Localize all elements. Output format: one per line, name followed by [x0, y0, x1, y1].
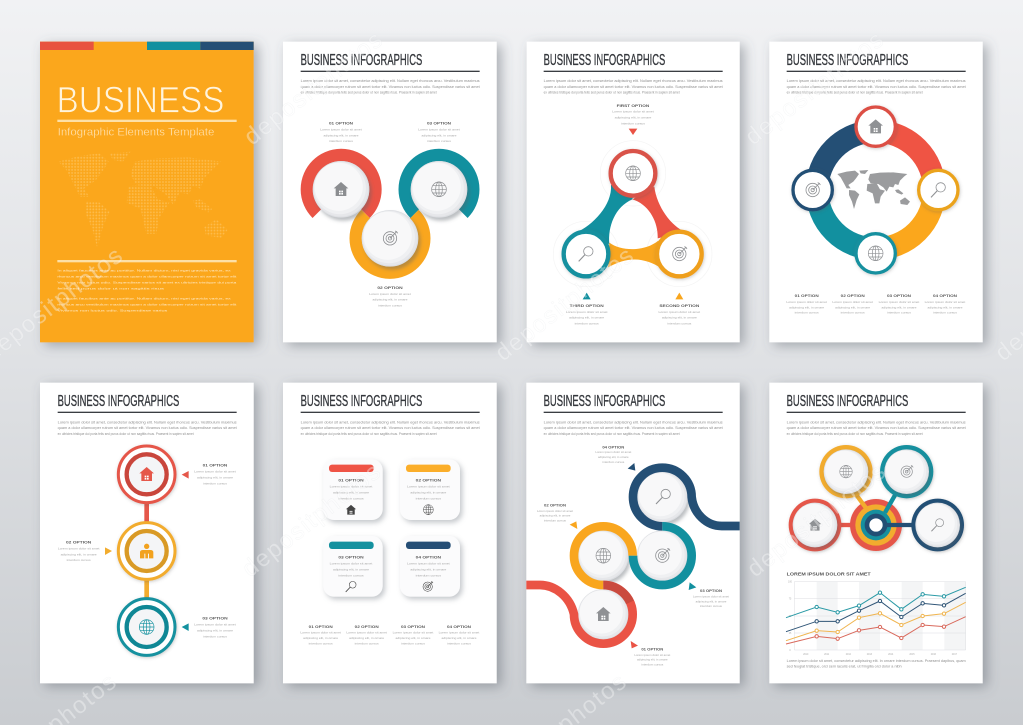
icon: home	[596, 607, 611, 621]
watermarks: depositphotos	[490, 241, 640, 367]
arrow: red	[629, 129, 637, 135]
connectors	[144, 503, 149, 599]
label: first option: FIRST OPTION	[617, 104, 650, 108]
intro text: Lorem ipsum dolor sit amet, consectetur adipiscing elit. Nullam eget rhoncus arcu. Vestibulum maximus	[301, 79, 480, 83]
band: red	[526, 585, 633, 644]
line chart: 2013	[867, 654, 873, 656]
card: 04 option	[400, 536, 460, 597]
label: 02 option: 02 OPTION	[66, 540, 92, 544]
line chart: 75	[789, 599, 792, 601]
node: magnifier	[911, 499, 964, 551]
heading: BUSINESS INFOGRAPHICS	[301, 52, 422, 69]
card: 03 option: Lorem ipsum dolor sit amet	[330, 561, 373, 565]
world map	[837, 170, 910, 209]
label: 01 option: interdum cursus	[641, 663, 664, 667]
intro text	[544, 420, 723, 436]
series: orange	[786, 602, 966, 641]
label: 04 option: adipiscing elit, in ornare	[927, 305, 963, 309]
label: 03 option	[194, 617, 236, 638]
card: 04 option: 04 OPTION	[416, 556, 441, 560]
label: third option: adipiscing elit, in ornare	[569, 316, 605, 320]
cover body text: rhoncus arcu vestibulum maximus quam a dolor ullamcorper rutrum sit amet tortor elit	[57, 302, 237, 306]
card: 04 option: adipiscing elit, in ornare	[410, 568, 447, 572]
label: 02 option: 02 OPTION	[841, 294, 865, 298]
label: 04 option: adipiscing elit, in ornare	[598, 455, 629, 459]
label: 01 option: 01 OPTION	[329, 122, 353, 126]
band: orange	[574, 526, 633, 585]
series: red	[786, 617, 966, 644]
line chart: 0	[789, 650, 791, 652]
card: 03 option: interdum cursus	[338, 573, 364, 577]
band: teal	[575, 185, 635, 244]
panel: cover page	[40, 42, 254, 342]
arc: orange	[356, 214, 424, 273]
label: 02 option	[58, 540, 100, 562]
cover body text: Vivamus non luctus odio. Suspendisse varius sit amet ex ultricies tristique dui porta	[57, 281, 237, 285]
icon: magnifier	[656, 489, 670, 504]
label: 03 option: interdum cursus	[427, 139, 452, 143]
intro text: Lorem ipsum dolor sit amet, consectetur adipiscing elit. Nullam eget rhoncus arcu. Vestibulum maximus	[787, 79, 966, 83]
intro text: ex ultricies tristique dui porta felis sed purus dolor ut non sagittis risus. Praesent in sapien sit amet	[787, 91, 923, 95]
disc: target	[362, 210, 421, 270]
node: target	[793, 170, 832, 210]
node: home	[118, 446, 175, 503]
arrow: red	[182, 471, 189, 479]
label: 02 option: Lorem ipsum dolor sit amet	[58, 547, 100, 551]
label: 04 option: Lorem ipsum dolor sit amet	[595, 450, 631, 454]
discs	[578, 472, 690, 642]
heading: BUSINESS INFOGRAPHICS	[301, 393, 422, 410]
label: 01 option: 01 OPTION	[641, 648, 664, 652]
heading: BUSINESS INFOGRAPHICS	[544, 52, 665, 69]
line chart: 2011	[824, 654, 830, 656]
label: 01 option	[300, 625, 341, 645]
arrow: teal	[182, 623, 189, 631]
intro text: quam a dolor ullamcorper rutrum sit amet tortor elit. Vivamus non luctus odio. Suspendisse varius sit amet	[787, 85, 966, 89]
chart caption	[787, 659, 966, 669]
card: 02 option: Lorem ipsum dolor sit amet	[407, 485, 450, 489]
label: 01 option	[634, 648, 670, 667]
band: red	[632, 187, 685, 238]
intro text: ex ultricies tristique dui porta felis sed purus dolor ut non sagittis risus. Praesent in sapien sit amet	[58, 432, 194, 436]
series: navy	[786, 593, 966, 632]
panel: hub diagram and line chart	[769, 383, 983, 683]
label: second option: interdum cursus	[667, 321, 692, 325]
arrow: orange	[570, 521, 577, 529]
label: 02 option: interdum cursus	[355, 641, 379, 645]
label: 03 option: interdum cursus	[401, 641, 426, 645]
label: 03 option: interdum cursus	[203, 634, 228, 638]
icon: target	[656, 548, 670, 562]
label: 03 option	[393, 625, 434, 645]
intro text: quam a dolor ullamcorper rutrum sit amet tortor elit. Vivamus non luctus odio. Suspendisse varius sit amet	[301, 426, 480, 430]
label: 03 option: Lorem ipsum dolor sit amet	[418, 128, 460, 132]
ring segments	[817, 131, 934, 249]
node: target	[880, 445, 933, 498]
label: 03 option: adipiscing elit, in ornare	[881, 305, 917, 309]
label: 03 option: adipiscing elit, in ornare	[197, 629, 233, 633]
label: 04 option: interdum cursus	[933, 311, 958, 315]
node: magnifier	[564, 232, 608, 276]
node: globe	[611, 151, 655, 196]
intro text: Lorem ipsum dolor sit amet, consectetur adipiscing elit. Nullam eget rhoncus arcu. Vestibulum maximus	[544, 420, 723, 424]
band: teal	[633, 526, 692, 585]
label: 04 option	[439, 625, 480, 645]
cover colour tabs	[40, 42, 254, 50]
line chart: 25	[789, 633, 792, 635]
label: first option: interdum cursus	[621, 121, 646, 125]
label: 03 option: adipiscing elit, in ornare	[421, 133, 457, 137]
band: orange	[608, 241, 662, 268]
label: 04 option: Lorem ipsum dolor sit amet	[439, 631, 480, 635]
intro text: ex ultricies tristique dui porta felis sed purus dolor ut non sagittis risus. Praesent in sapien sit amet	[301, 91, 437, 95]
intro text: Lorem ipsum dolor sit amet, consectetur adipiscing elit. Nullam eget rhoncus arcu. Vestibulum maximus	[301, 420, 480, 424]
heading: BUSINESS INFOGRAPHICS	[787, 393, 908, 410]
label: 03 option: Lorem ipsum dolor sit amet	[879, 300, 920, 304]
label: 01 option: 01 OPTION	[309, 625, 333, 629]
card: 01 option: interdum cursus	[338, 496, 364, 500]
label: first option: adipiscing elit, in ornare	[615, 115, 652, 119]
label: second option	[658, 304, 700, 325]
label: 01 option: 01 OPTION	[795, 294, 819, 298]
card: 01 option: Lorem ipsum dolor sit amet	[330, 485, 373, 489]
label: 03 option	[693, 589, 729, 608]
cover title: BUSINESS	[57, 80, 224, 121]
label: third option: THIRD OPTION	[570, 304, 604, 308]
chart caption: Lorem ipsum dolor sit amet, consectetur adipiscing elit. In ornare interdum cursus. Praesent dapibus, quam	[787, 659, 966, 663]
card: 01 option: 01 OPTION	[338, 479, 364, 483]
dotted world map	[58, 152, 228, 248]
label: second option: adipiscing elit, in ornare	[662, 316, 697, 320]
label: 01 option: adipiscing elit, in ornare	[323, 133, 359, 137]
label: 03 option: 03 OPTION	[700, 589, 722, 593]
intro text: quam a dolor ullamcorper rutrum sit amet tortor elit. Vivamus non luctus odio. Suspendisse varius sit amet	[787, 426, 966, 430]
cover body text: felis sed purus dolor ut non sagittis risus	[57, 286, 165, 290]
label: 04 option: Lorem ipsum dolor sit amet	[925, 300, 966, 304]
label: 01 option: Lorem ipsum dolor sit amet	[194, 470, 236, 474]
label: 02 option: adipiscing elit, in ornare	[540, 514, 571, 518]
line chart: 2010	[803, 654, 809, 656]
label: 02 option: adipiscing elit, in ornare	[61, 552, 97, 556]
label: 03 option: 03 OPTION	[887, 294, 911, 298]
label: 03 option	[418, 122, 460, 143]
faint halo rings	[553, 141, 712, 287]
series: teal	[786, 587, 966, 618]
cover subtitle: Infographic Elements Template	[58, 126, 214, 138]
card: 04 option: Lorem ipsum dolor sit amet	[407, 561, 450, 565]
label: 01 option	[320, 122, 362, 143]
node: home	[789, 499, 841, 551]
label: first option	[612, 104, 654, 125]
node: globe	[819, 445, 873, 498]
arrow: teal	[689, 582, 696, 590]
label: 02 option: adipiscing elit, in ornare	[349, 636, 385, 640]
arrow: red	[631, 641, 638, 648]
label: 03 option: interdum cursus	[887, 311, 912, 315]
label: third option: interdum cursus	[575, 321, 599, 325]
intro text: ex ultricies tristique dui porta felis sed purus dolor ut non sagittis risus. Praesent in sapien sit amet	[544, 432, 680, 436]
intro text: Lorem ipsum dolor sit amet, consectetur adipiscing elit. Nullam eget rhoncus arcu. Vestibulum maximus	[58, 420, 237, 424]
heading: BUSINESS INFOGRAPHICS	[58, 393, 179, 410]
label: 04 option	[595, 445, 631, 464]
arrow: orange	[105, 547, 112, 555]
band: navy	[633, 468, 740, 526]
heading: BUSINESS INFOGRAPHICS	[544, 393, 665, 410]
label: 02 option: interdum cursus	[67, 558, 91, 562]
intro text: quam a dolor ullamcorper rutrum sit amet tortor elit. Vivamus non luctus odio. Suspendisse varius sit amet	[301, 85, 480, 89]
intro text: quam a dolor ullamcorper rutrum sit amet tortor elit. Vivamus non luctus odio. Suspendisse varius sit amet	[58, 426, 237, 430]
card: 02 option: adipiscing elit, in ornare	[410, 491, 447, 495]
line chart: 2016	[931, 654, 937, 656]
label: 02 option: Lorem ipsum dolor sit amet	[537, 509, 573, 513]
arrow: navy	[628, 463, 635, 471]
label: 04 option	[925, 294, 966, 315]
label: third option	[566, 304, 608, 325]
line chart: 2017	[952, 654, 958, 656]
intro text: Lorem ipsum dolor sit amet, consectetur adipiscing elit. Nullam eget rhoncus arcu. Vestibulum maximus	[787, 420, 966, 424]
arrow: teal	[583, 293, 591, 299]
cover body text: Vivamus non luctus odio. Suspendisse varius	[57, 308, 168, 312]
line chart: 2012	[846, 654, 852, 656]
label: 02 option: Lorem ipsum dolor sit amet	[832, 300, 873, 304]
disc: home	[313, 161, 372, 221]
node: target	[657, 232, 702, 276]
label: 02 option: Lorem ipsum dolor sit amet	[369, 292, 411, 296]
line chart	[786, 582, 966, 656]
watermarks: depositphotos	[239, 25, 389, 151]
cover body text: In aliquet faucibus ante ac porttitor. Nullam dictum, nisi eget gravida varius, ex	[57, 269, 232, 273]
label: 01 option	[786, 294, 827, 315]
label: 03 option: Lorem ipsum dolor sit amet	[693, 595, 729, 599]
heading: BUSINESS INFOGRAPHICS	[787, 52, 908, 69]
label: 01 option: interdum cursus	[309, 641, 333, 645]
label: 03 option: Lorem ipsum dolor sit amet	[194, 623, 236, 627]
arc: red	[307, 155, 375, 214]
disc: globe	[411, 161, 470, 221]
node: globe	[118, 599, 175, 655]
chart heading: LOREM IPSUM DOLOR SIT AMET	[787, 571, 871, 576]
card: 03 option: adipiscing elit, in ornare	[333, 568, 369, 572]
intro text: quam a dolor ullamcorper rutrum sit amet tortor elit. Vivamus non luctus odio. Suspendisse varius sit amet	[544, 85, 723, 89]
intro text: ex ultricies tristique dui porta felis sed purus dolor ut non sagittis risus. Praesent in sapien sit amet	[301, 432, 437, 436]
label: 01 option: Lorem ipsum dolor sit amet	[320, 128, 362, 132]
node: magnifier	[919, 170, 958, 210]
card: 01 option: adipiscing elit, in ornare	[333, 491, 369, 495]
panel: three node cycle	[527, 42, 740, 342]
label: 01 option: adipiscing elit, in ornare	[303, 636, 339, 640]
label: 02 option: adipiscing elit, in ornare	[835, 305, 871, 309]
label: 02 option	[346, 625, 387, 645]
panel: four segment ring	[769, 42, 983, 342]
card: 03 option	[323, 536, 383, 597]
intro text: Lorem ipsum dolor sit amet, consectetur adipiscing elit. Nullam eget rhoncus arcu. Vestibulum maximus	[544, 79, 723, 83]
label: 02 option	[537, 504, 573, 523]
label: 01 option: adipiscing elit, in ornare	[637, 658, 668, 662]
label: 01 option: adipiscing elit, in ornare	[789, 305, 825, 309]
label: 02 option: 02 OPTION	[377, 286, 403, 290]
card: 04 option: interdum cursus	[416, 573, 442, 577]
label: 03 option: adipiscing elit, in ornare	[395, 636, 431, 640]
panel: vertical timeline	[40, 383, 254, 683]
card: 02 option: interdum cursus	[416, 496, 442, 500]
panel: three overlapping arcs	[283, 42, 497, 342]
label: 01 option: Lorem ipsum dolor sit amet	[786, 300, 827, 304]
card: 02 option	[400, 459, 460, 520]
chart caption: sed feugiat tristique, orci sem iaculis erat, ut fringilla orci dolor a nibh	[787, 665, 902, 669]
label: third option: Lorem ipsum dolor sit amet	[566, 310, 608, 314]
label: 02 option: Lorem ipsum dolor sit amet	[346, 631, 387, 635]
label: 04 option: 04 OPTION	[602, 445, 625, 449]
label: 03 option: adipiscing elit, in ornare	[696, 599, 727, 603]
node: home	[856, 107, 895, 146]
intro text	[301, 420, 480, 436]
label: 03 option: Lorem ipsum dolor sit amet	[393, 631, 434, 635]
intro text: ex ultricies tristique dui porta felis sed purus dolor ut non sagittis risus. Praesent in sapien sit amet	[544, 91, 680, 95]
label: second option: Lorem ipsum dolor sit amet	[658, 310, 700, 314]
line chart: 2014	[888, 654, 894, 656]
node: person	[118, 523, 175, 579]
intro text	[58, 420, 237, 436]
label: 04 option: 04 OPTION	[933, 294, 957, 298]
connectors	[840, 494, 913, 525]
card: 02 option: 02 OPTION	[416, 479, 441, 483]
label: 01 option: adipiscing elit, in ornare	[197, 476, 233, 480]
icon: globe	[596, 548, 611, 563]
card: 01 option	[323, 459, 383, 520]
label: 01 option: interdum cursus	[203, 481, 228, 485]
panel: winding path	[526, 383, 740, 683]
label: 02 option: 02 OPTION	[355, 625, 379, 629]
cover body text: rhoncus arcu vestibulum maximus quam a dolor ullamcorper rutrum sit amet tortor elit	[57, 275, 237, 279]
label: 01 option: Lorem ipsum dolor sit amet	[634, 653, 670, 657]
label: 04 option: interdum cursus	[602, 460, 625, 464]
intro text	[787, 420, 966, 436]
label: 01 option: interdum cursus	[329, 139, 354, 143]
label: 04 option: adipiscing elit, in ornare	[441, 636, 477, 640]
card: 03 option: 03 OPTION	[338, 556, 364, 560]
line chart: 50	[789, 616, 792, 618]
panel: four cards	[283, 383, 497, 683]
label: 01 option: interdum cursus	[795, 311, 819, 315]
label: 01 option: 01 OPTION	[203, 464, 228, 468]
label: 03 option: 03 OPTION	[202, 617, 228, 621]
label: 02 option: adipiscing elit, in ornare	[372, 298, 408, 302]
hub	[850, 499, 902, 551]
label: 01 option: Lorem ipsum dolor sit amet	[300, 631, 341, 635]
label: 02 option: 02 OPTION	[544, 504, 566, 508]
intro text: ex ultricies tristique dui porta felis sed purus dolor ut non sagittis risus. Praesent in sapien sit amet	[787, 432, 923, 436]
cover body text	[57, 269, 237, 312]
label: 04 option: interdum cursus	[447, 641, 472, 645]
label: first option: Lorem ipsum dolor sit amet	[612, 110, 654, 114]
watermarks: depositphotos	[742, 457, 892, 583]
arrow: orange	[675, 293, 683, 299]
cover body text: In aliquet faucibus ante ac porttitor. Nullam dictum, nisi eget gravida varius, ex	[57, 296, 232, 300]
label: 04 option: 04 OPTION	[447, 625, 471, 629]
label: 02 option: interdum cursus	[841, 311, 865, 315]
label: 03 option	[879, 294, 920, 315]
watermarks: depositphotos	[740, 25, 890, 151]
intro text	[544, 79, 723, 95]
label: 02 option: interdum cursus	[544, 519, 567, 523]
intro text: quam a dolor ullamcorper rutrum sit amet tortor elit. Vivamus non luctus odio. Suspendisse varius sit amet	[544, 426, 723, 430]
label: 03 option: 03 OPTION	[401, 625, 425, 629]
label: second option: SECOND OPTION	[659, 304, 700, 308]
intro text	[787, 79, 966, 95]
label: 02 option	[369, 286, 411, 307]
label: 02 option: interdum cursus	[378, 303, 403, 307]
watermarks: depositphotos	[237, 457, 387, 583]
label: 03 option: 03 OPTION	[427, 122, 451, 126]
line chart: 100	[788, 582, 793, 584]
arc: teal	[405, 155, 473, 214]
label: 03 option: interdum cursus	[700, 604, 723, 608]
line chart: 2015	[909, 654, 915, 656]
label: 02 option	[832, 294, 873, 315]
label: 01 option	[194, 464, 236, 485]
intro text	[301, 79, 480, 95]
node: globe	[856, 234, 895, 273]
